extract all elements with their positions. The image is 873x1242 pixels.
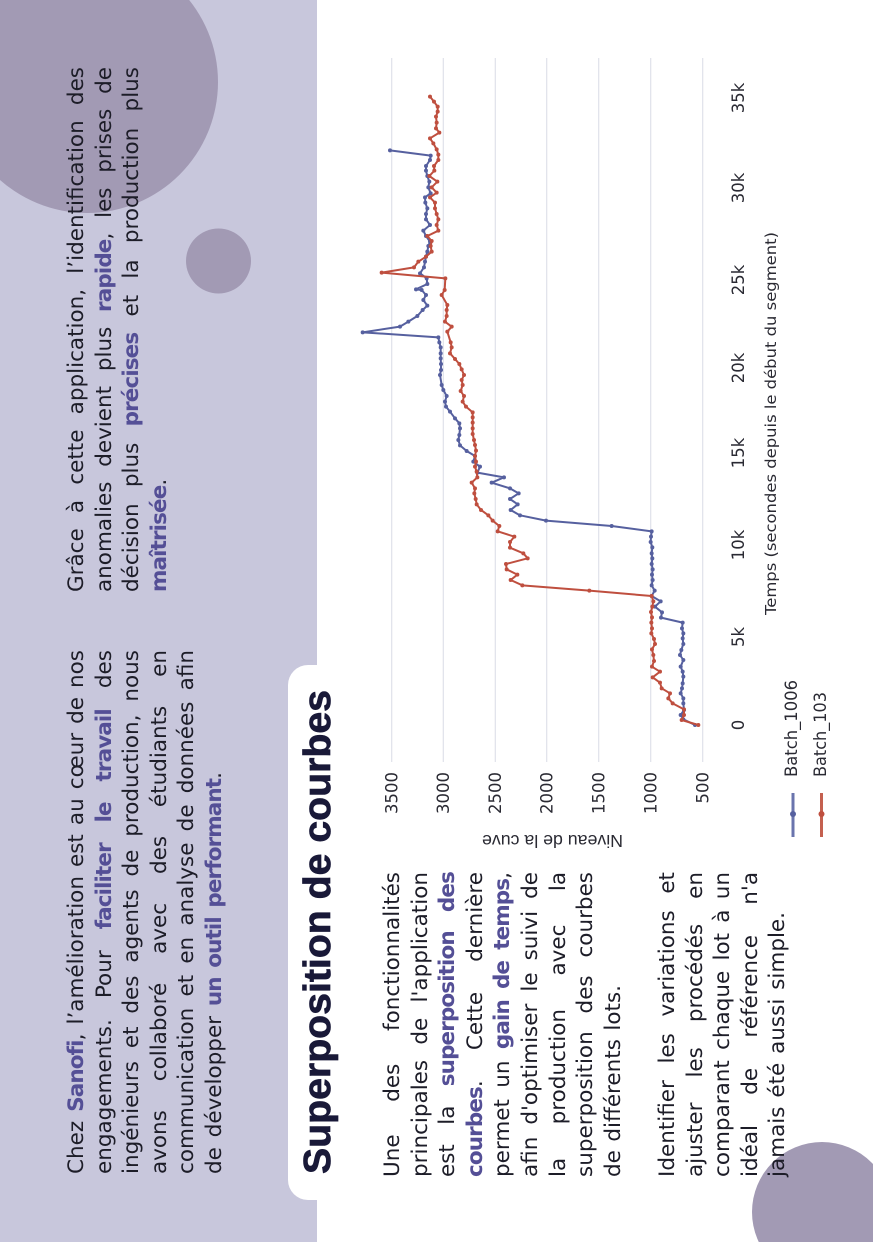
x axis tick labels: 25k: [729, 264, 748, 295]
x axis tick labels: 35k: [729, 82, 748, 113]
heading: Superposition de courbes: [297, 690, 339, 1174]
decorative bottom circle: [752, 1142, 873, 1242]
x axis tick labels: 0: [729, 720, 748, 730]
x axis tick labels: 30k: [729, 172, 748, 203]
text block: main feature: superposition des courbes: [573, 872, 598, 1177]
text block: benefits: maîtrisée.: [147, 479, 172, 592]
text block: main feature: permet un gain de temps,: [490, 872, 515, 1177]
text block: main feature: est la superposition des: [435, 872, 460, 1177]
text block: introduction: communication et en analyse de données afin: [174, 650, 199, 1174]
text block: benefits: décision plus précises et la production plus: [119, 67, 144, 592]
series: Batch_103: [382, 97, 698, 725]
x axis tick labels: 20k: [729, 352, 748, 383]
text block: main feature: Une des fonctionnalités: [380, 872, 405, 1177]
y axis tick labels: 3500: [382, 772, 402, 814]
x axis tick labels: 5k: [729, 627, 748, 647]
text block: variations: idéal de référence n'a: [738, 872, 763, 1177]
text block: variations: comparant chaque lot à un: [710, 872, 735, 1177]
y axis tick labels: 2500: [486, 772, 505, 814]
y axis tick labels: 2000: [538, 772, 556, 814]
legend key: Batch_1006: [782, 680, 802, 837]
text block: variations: ajuster les procédés en: [683, 872, 708, 1177]
decorative large circle: [0, 0, 218, 213]
text block: variations: jamais été aussi simple.: [765, 912, 790, 1177]
legend key: Batch_1006: Batch_1006: [782, 680, 802, 777]
text block: introduction: de développer un outil performant.: [202, 772, 227, 1174]
text block: introduction: avons collaboré avec des étudiants en: [147, 650, 172, 1174]
x axis tick labels: 15k: [729, 437, 748, 468]
x axis tick labels: [729, 82, 748, 730]
text block: main feature: afin d'optimiser le suivi de: [518, 872, 543, 1177]
text block: variations: Identifier les variations et: [655, 872, 680, 1177]
legend: [782, 680, 831, 837]
text block: main feature: [380, 872, 626, 1177]
text block: main feature: courbes. Cette dernière: [463, 872, 488, 1177]
y axis tick labels: 1500: [590, 772, 608, 814]
y axis tick labels: [382, 772, 712, 814]
x axis title: Temps (secondes depuis le début du segment): [762, 232, 780, 616]
heading tab: [288, 665, 320, 1200]
text block: main feature: principales de l'application: [408, 872, 433, 1177]
text block: variations: [655, 872, 790, 1178]
text block: introduction: Chez Sanofi, l’amélioration est au cœur de nos: [64, 650, 89, 1174]
legend key: Batch_103: [811, 692, 831, 837]
panel: lavender side band: [0, 0, 317, 1242]
text block: introduction: [64, 650, 227, 1174]
text block: benefits: anomalies devient plus rapide, les prises de: [92, 67, 117, 592]
decorative small circle: [186, 228, 251, 294]
x axis tick labels: 10k: [729, 529, 748, 560]
series: Batch_1006: [363, 150, 695, 725]
y axis tick labels: 500: [694, 772, 712, 804]
text block: introduction: engagements. Pour faciliter le travail des: [92, 650, 117, 1174]
text block: introduction: ingénieurs et des agents de production, nous: [119, 650, 144, 1174]
legend key: Batch_103: Batch_103: [811, 692, 831, 777]
text block: benefits: [64, 67, 172, 592]
y axis tick labels: 3000: [434, 772, 453, 814]
text block: main feature: de différents lots.: [601, 985, 626, 1177]
text block: main feature: la production avec la: [546, 872, 571, 1177]
series lines: [363, 97, 698, 725]
y axis title: Niveau de la cuve: [482, 831, 623, 851]
y axis tick labels: 1000: [642, 772, 660, 814]
text block: benefits: Grâce à cette application, l’identification des: [64, 67, 89, 592]
